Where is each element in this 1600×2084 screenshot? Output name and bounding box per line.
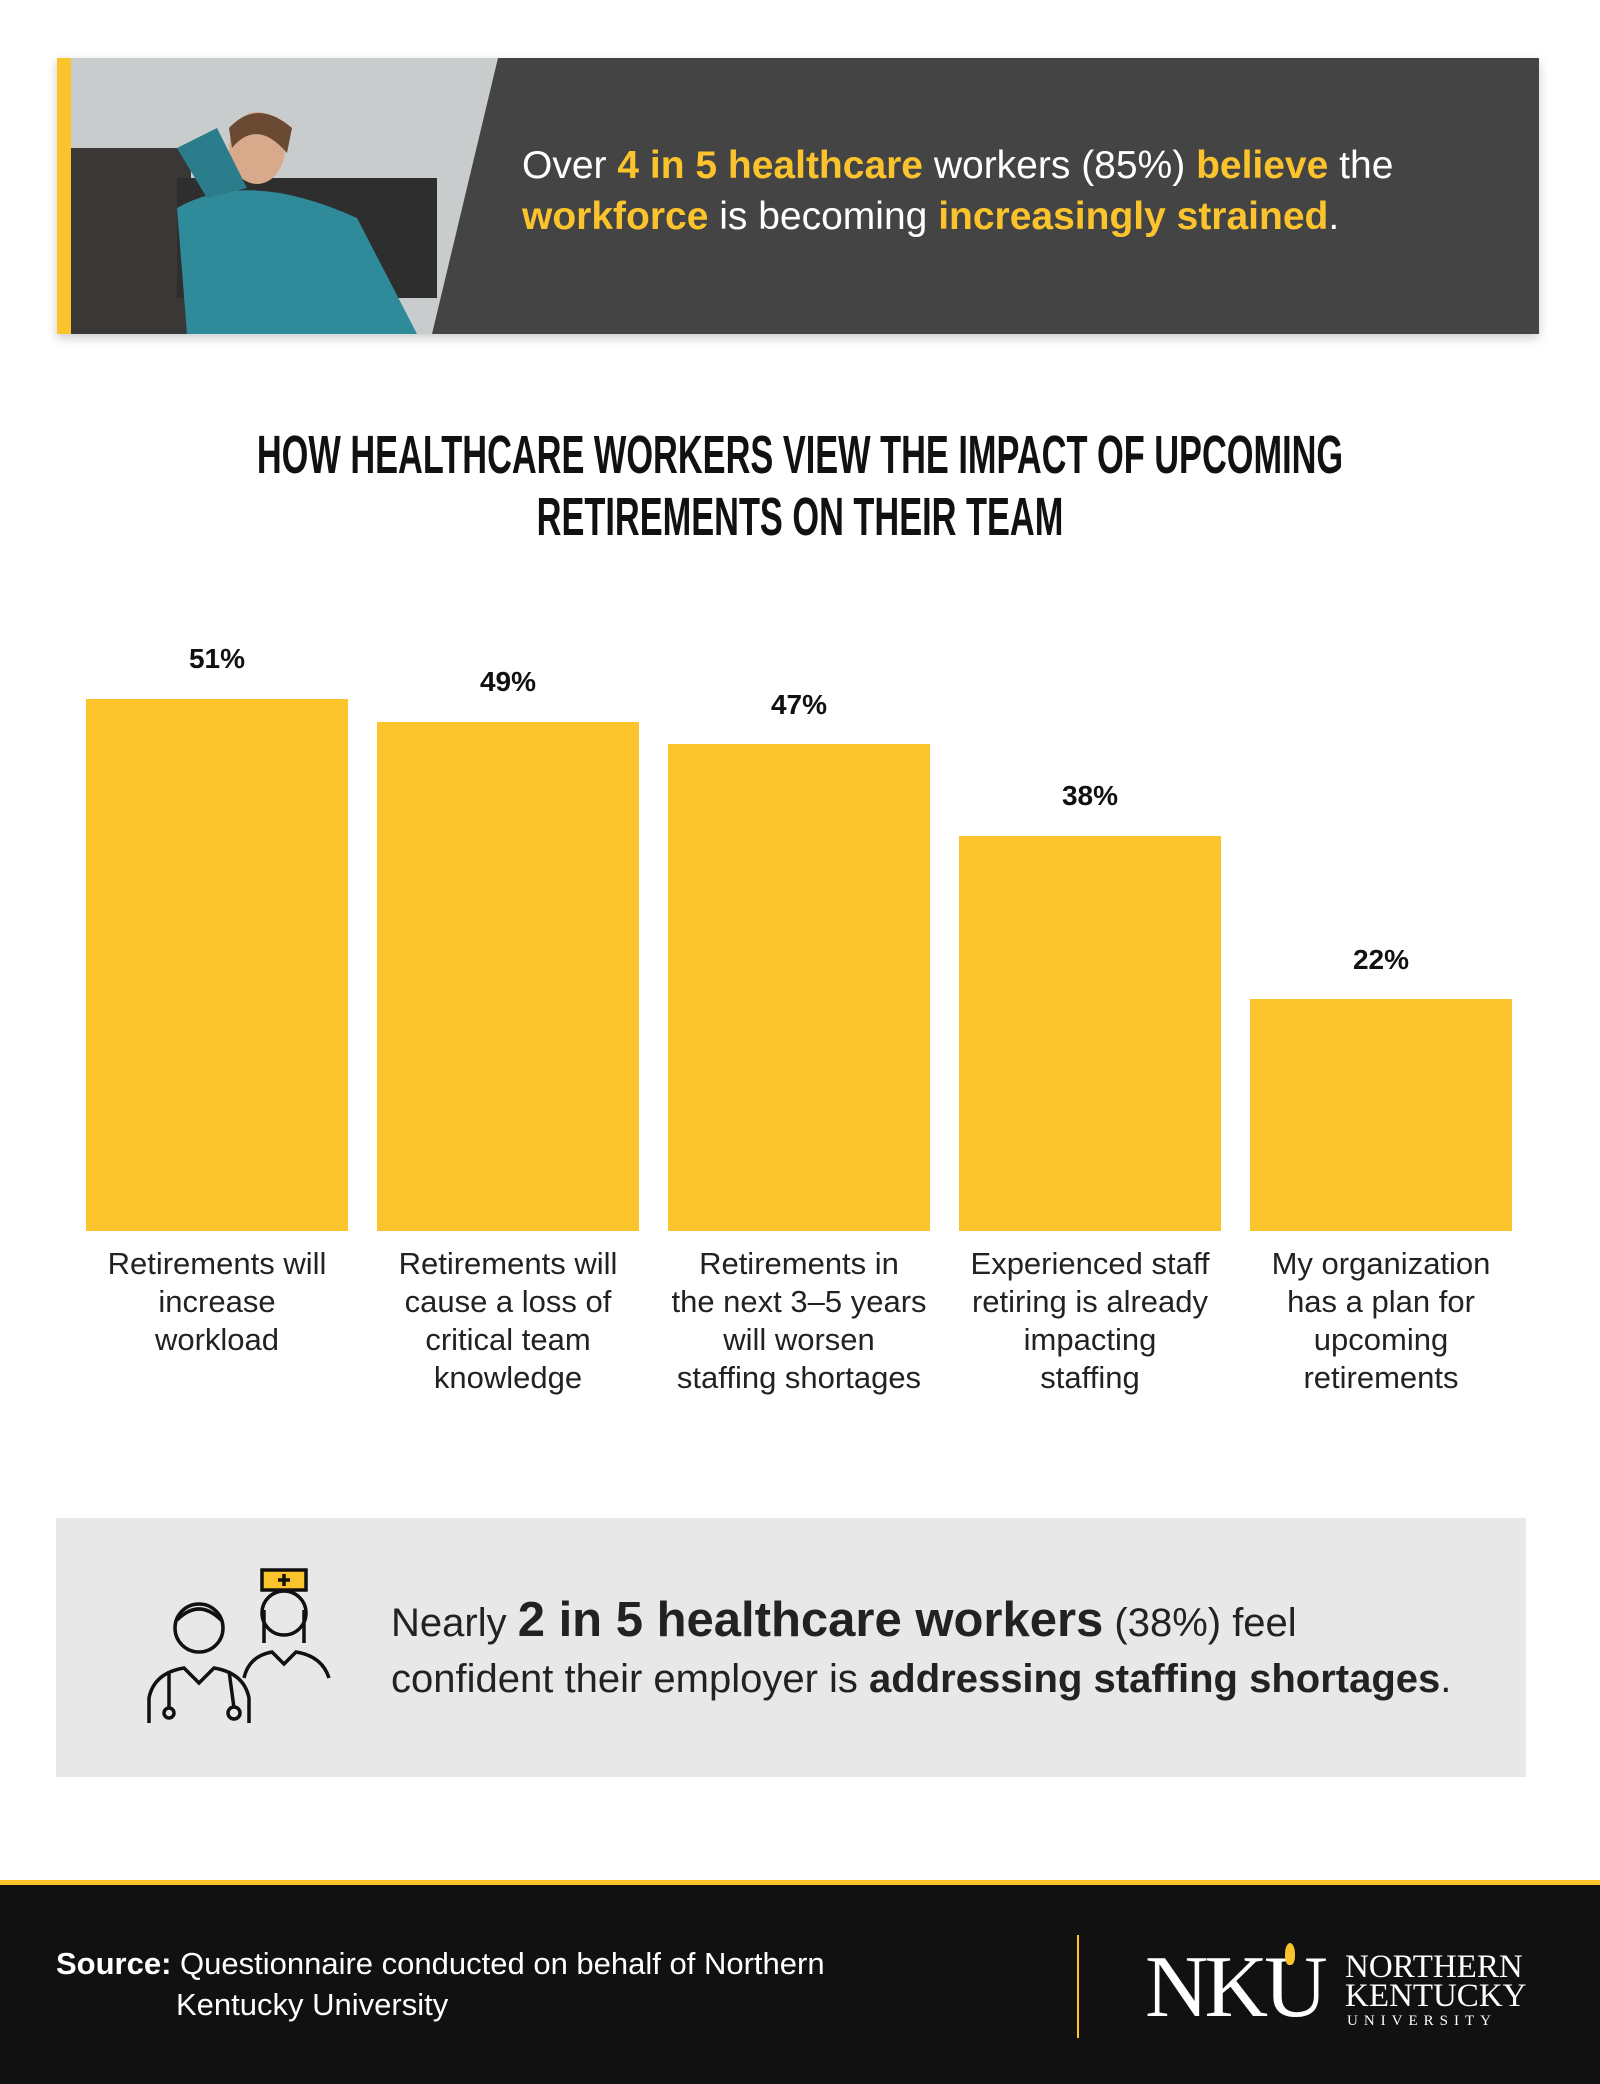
photo — [57, 58, 498, 334]
bar chart: retirements — [1303, 1360, 1459, 1395]
title — [257, 425, 1343, 547]
icon: doctor and nurse — [147, 1568, 331, 1723]
bar chart: 22% — [1353, 944, 1409, 975]
bar chart: will worsen — [723, 1322, 875, 1357]
source text — [56, 1946, 825, 2022]
callout text — [391, 1593, 1451, 1701]
bar chart: the next 3–5 years — [671, 1284, 927, 1319]
bar chart: Retirements will — [399, 1246, 617, 1281]
bar chart: 38% — [1062, 780, 1118, 811]
bar chart: Experienced staff — [971, 1246, 1209, 1281]
logo: UNIVERSITY — [1347, 2013, 1497, 2029]
callout text: Nearly 2 in 5 healthcare workers (38%) feel — [391, 1593, 1297, 1647]
logo: NKU — [1145, 1939, 1324, 2036]
bar chart: increase — [158, 1284, 276, 1319]
bar chart: Retirements will — [108, 1246, 326, 1281]
bar chart: critical team — [425, 1322, 591, 1357]
callout box — [56, 1518, 1526, 1777]
source text: Source: Questionnaire conducted on behalf of Northern — [56, 1946, 825, 1981]
bar chart: 49% — [480, 666, 536, 697]
bar chart: knowledge — [434, 1360, 582, 1395]
bar chart: upcoming — [1314, 1322, 1448, 1357]
bar chart: retiring is already — [972, 1284, 1208, 1319]
logo: KENTUCKY — [1345, 1978, 1526, 2014]
bar chart: cause a loss of — [405, 1284, 611, 1319]
callout text: confident their employer is addressing staffing shortages. — [391, 1657, 1451, 1701]
logo — [1145, 1939, 1526, 2036]
bar chart: has a plan for — [1287, 1284, 1475, 1319]
bar chart: staffing shortages — [677, 1360, 921, 1395]
bar chart: 47% — [771, 689, 827, 720]
title: HOW HEALTHCARE WORKERS VIEW THE IMPACT OF UPCOMING — [257, 425, 1343, 485]
source text: Kentucky University — [176, 1987, 448, 2022]
bar chart: impacting — [1024, 1322, 1156, 1357]
bar chart: My organization — [1272, 1246, 1490, 1281]
bar chart — [86, 643, 1512, 1395]
title: RETIREMENTS ON THEIR TEAM — [537, 487, 1063, 547]
bar chart: staffing — [1040, 1360, 1140, 1395]
logo: NORTHERN — [1345, 1949, 1523, 1985]
bar chart: workload — [155, 1322, 279, 1357]
headline: Over 4 in 5 healthcare workers (85%) believe the workforce is becoming increasingly strained. — [522, 144, 1393, 238]
bar chart: 51% — [189, 643, 245, 674]
footer — [0, 1880, 1600, 2084]
bar chart: Retirements in — [699, 1246, 899, 1281]
top banner — [57, 58, 1539, 334]
